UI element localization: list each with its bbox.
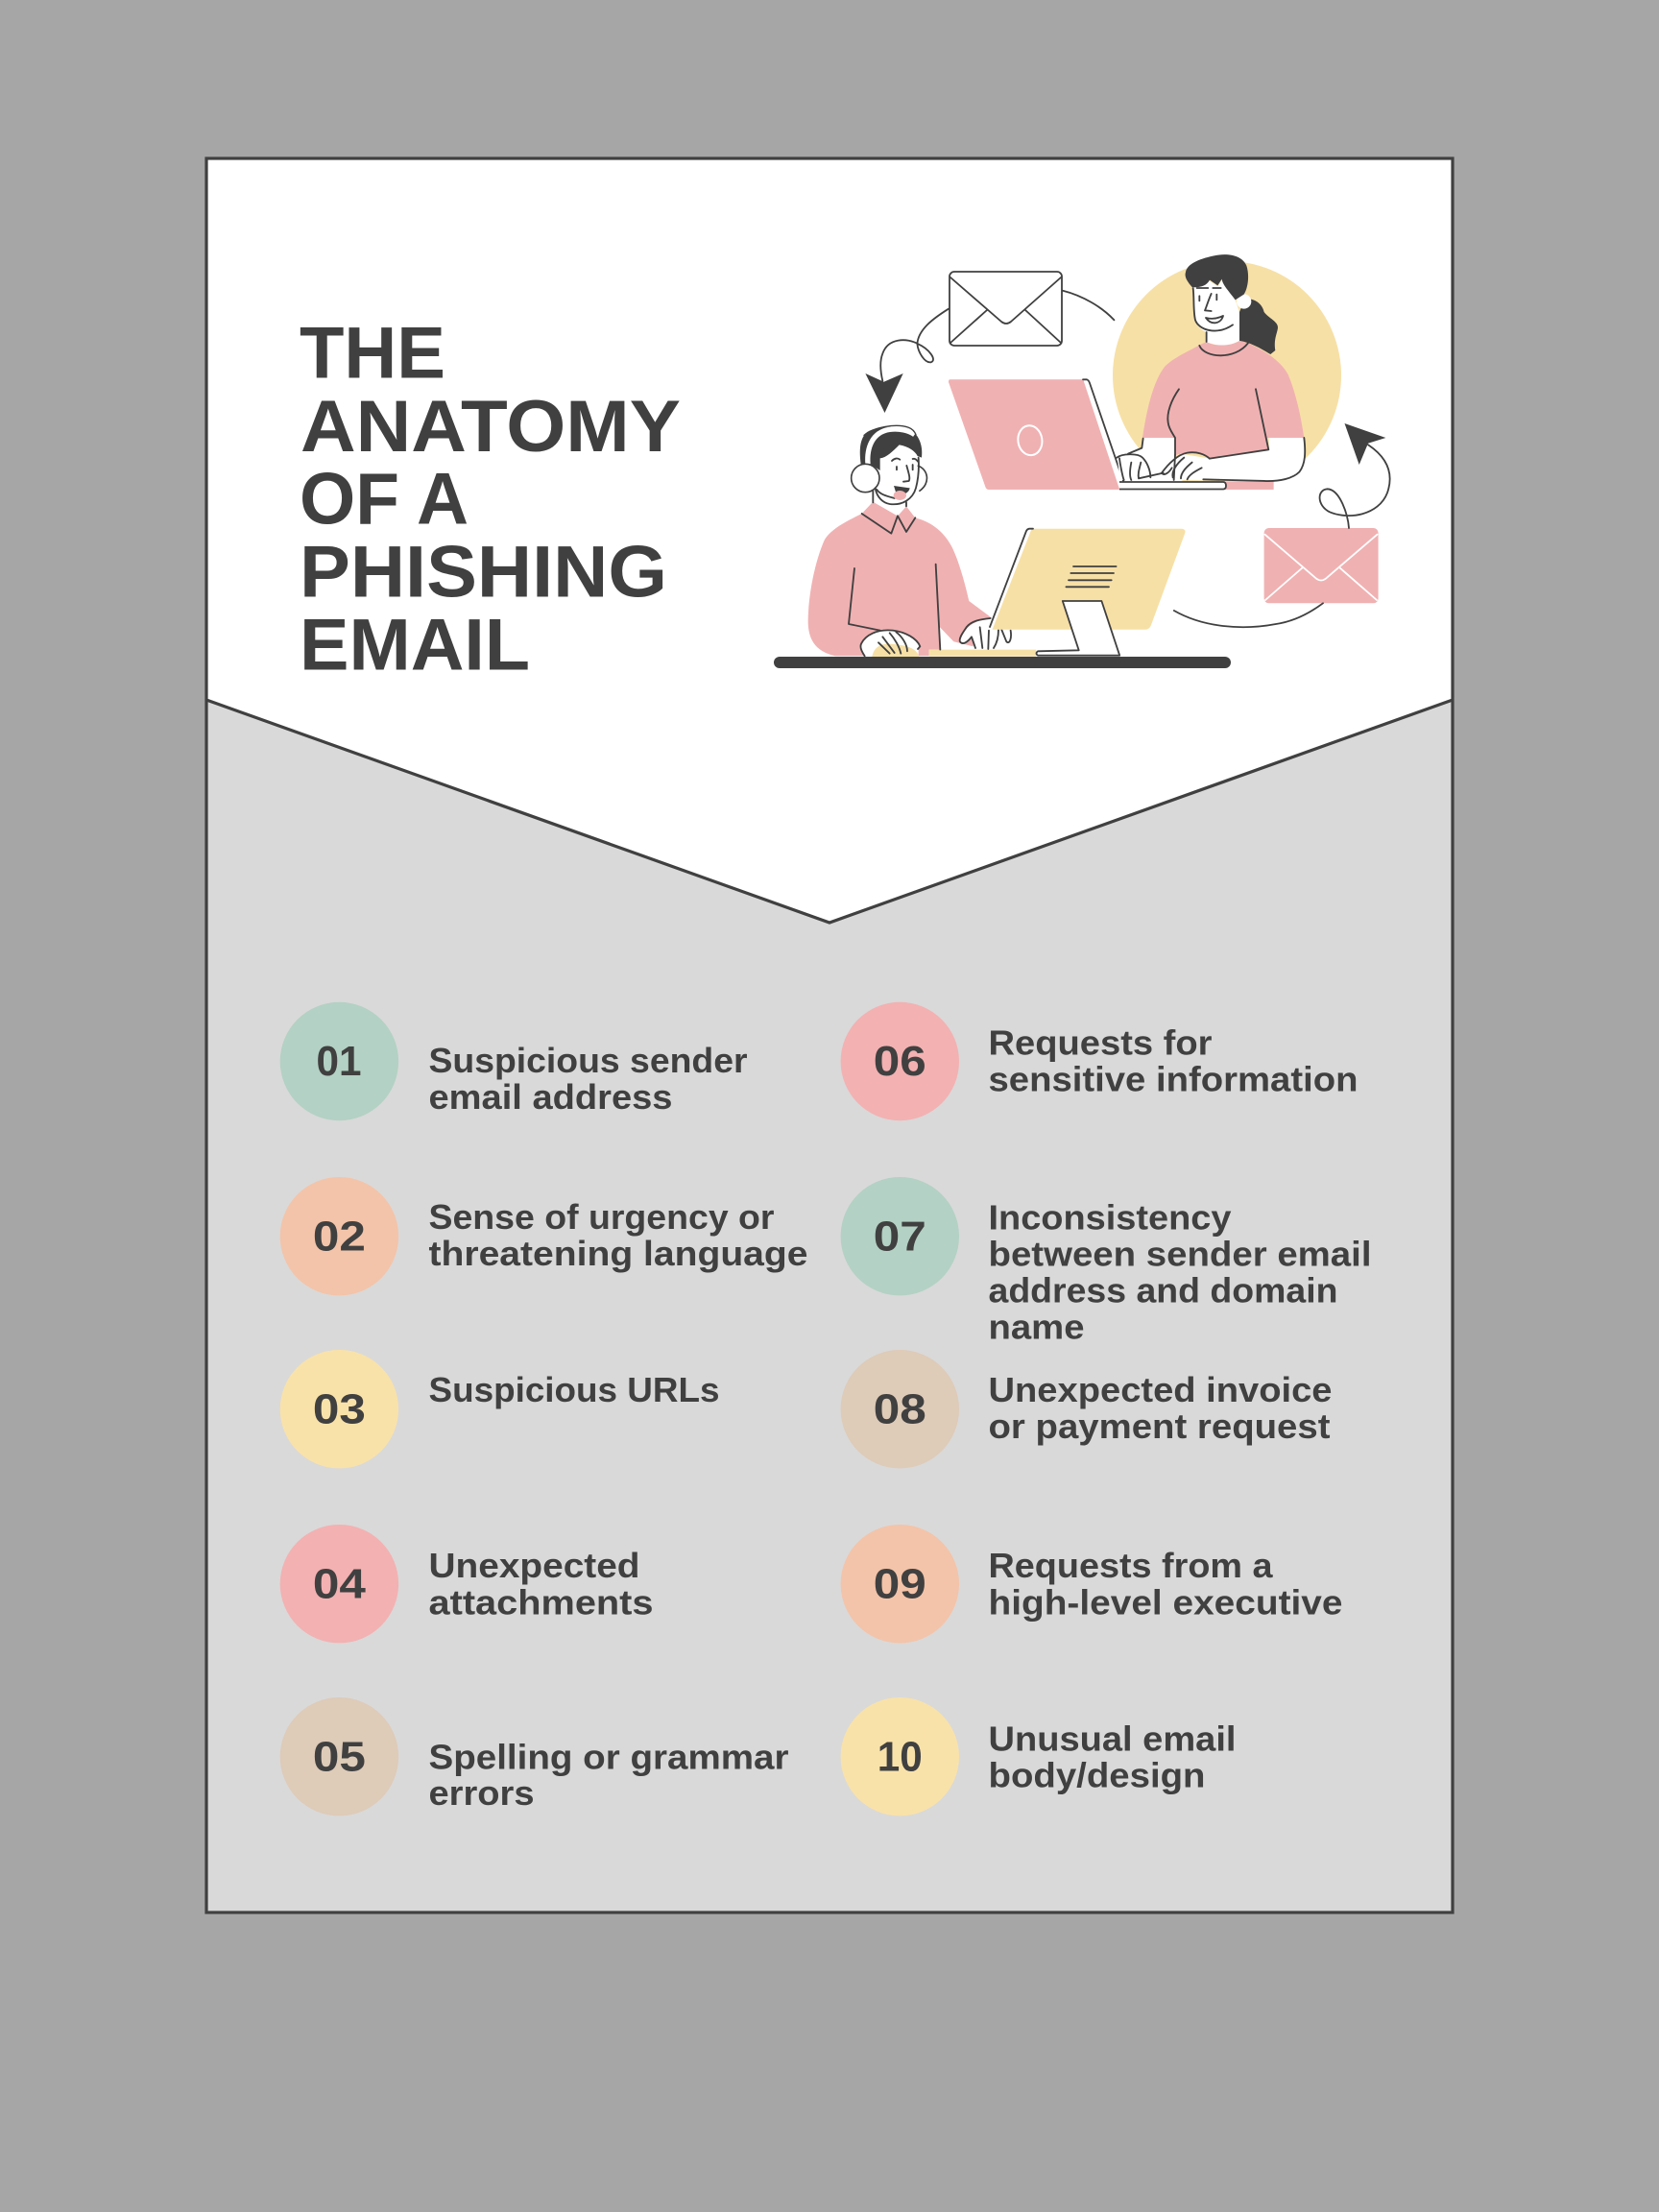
list item 07: Inconsistency xyxy=(989,1198,1232,1238)
list item 06 xyxy=(841,1002,1358,1120)
list item 09: high-level executive xyxy=(989,1583,1342,1623)
desk xyxy=(774,657,1231,668)
arms xyxy=(1117,438,1306,481)
icon: top envelope xyxy=(950,272,1062,346)
title xyxy=(300,313,681,685)
neck and face xyxy=(873,456,919,516)
list item 03: Suspicious URLs xyxy=(428,1370,720,1409)
list item 05 xyxy=(280,1697,789,1815)
mouse hand xyxy=(860,630,920,657)
woman xyxy=(1117,254,1306,490)
icon: pink envelope xyxy=(1264,528,1379,603)
list item 01 xyxy=(280,1002,747,1120)
list item 10 xyxy=(841,1697,1237,1815)
icon: pink laptop xyxy=(949,379,1123,490)
typing hand xyxy=(960,618,1011,649)
title: EMAIL xyxy=(300,605,530,685)
headset xyxy=(852,425,926,493)
list item 06: Requests for xyxy=(989,1022,1212,1062)
list item 07: address and domain xyxy=(989,1271,1338,1310)
icon: monitor xyxy=(990,529,1185,656)
ear xyxy=(1237,294,1251,309)
list item 05: errors xyxy=(428,1773,534,1813)
list item 02 xyxy=(280,1177,808,1295)
icon: laptop keyboard xyxy=(1119,482,1226,490)
hair top xyxy=(1186,254,1248,300)
list item 08: or payment request xyxy=(989,1407,1331,1446)
list item 07: name xyxy=(989,1308,1085,1347)
list item 07 xyxy=(841,1177,1371,1347)
man xyxy=(808,425,1036,657)
list item 06: sensitive information xyxy=(989,1059,1358,1098)
arrow: woman to pink envelope xyxy=(1174,603,1323,627)
list item 01: email address xyxy=(428,1077,672,1117)
list item 07: 07 xyxy=(874,1214,926,1261)
list item 02: 02 xyxy=(313,1214,366,1261)
list item 03 xyxy=(280,1350,720,1468)
list item 08: 08 xyxy=(874,1386,926,1433)
list item 05: Spelling or grammar xyxy=(428,1738,789,1777)
list item 01: Suspicious sender xyxy=(428,1041,747,1080)
arrow: pink envelope back to woman xyxy=(1320,423,1390,528)
face xyxy=(1193,280,1239,348)
mouth xyxy=(894,486,910,494)
list item 02: threatening language xyxy=(428,1234,808,1273)
list item 09: Requests from a xyxy=(989,1546,1273,1585)
man line work xyxy=(849,458,940,650)
title: OF A xyxy=(300,459,469,541)
title: PHISHING xyxy=(300,532,667,613)
list item 04: 04 xyxy=(313,1561,366,1608)
hair ponytail xyxy=(1239,299,1278,354)
list item 06: 06 xyxy=(874,1038,926,1085)
list item 04 xyxy=(280,1525,653,1643)
panel: poster card xyxy=(206,158,1453,1912)
list item 09 xyxy=(841,1525,1342,1643)
title: ANATOMY xyxy=(301,386,681,468)
list item 01: 01 xyxy=(317,1038,361,1085)
list item 04: attachments xyxy=(428,1583,653,1623)
shirt xyxy=(1142,341,1304,459)
title: THE xyxy=(300,313,445,394)
list item 09: 09 xyxy=(874,1561,926,1608)
list item 08 xyxy=(841,1350,1333,1468)
monitor stand xyxy=(1037,601,1119,656)
shirt hem below keyboard xyxy=(1226,482,1274,490)
arrow: top envelope to man xyxy=(865,291,1114,413)
hair xyxy=(860,427,922,470)
list item 10: body/design xyxy=(989,1756,1206,1795)
list item 03: 03 xyxy=(313,1386,366,1433)
list item 07: between sender email xyxy=(989,1235,1371,1274)
illustration: people exchanging emails xyxy=(774,254,1390,668)
microphone xyxy=(894,491,906,500)
list item 08: Unexpected invoice xyxy=(989,1370,1333,1409)
list item 05: 05 xyxy=(313,1734,366,1781)
list item 10: Unusual email xyxy=(989,1719,1237,1758)
list item 04: Unexpected xyxy=(428,1546,639,1585)
sweater xyxy=(808,502,991,656)
list item 02: Sense of urgency or xyxy=(428,1197,774,1237)
list item 10: 10 xyxy=(878,1734,923,1781)
icon: yellow circle behind woman xyxy=(1113,261,1341,490)
keyboard xyxy=(929,650,1036,657)
woman line work xyxy=(1117,288,1305,481)
